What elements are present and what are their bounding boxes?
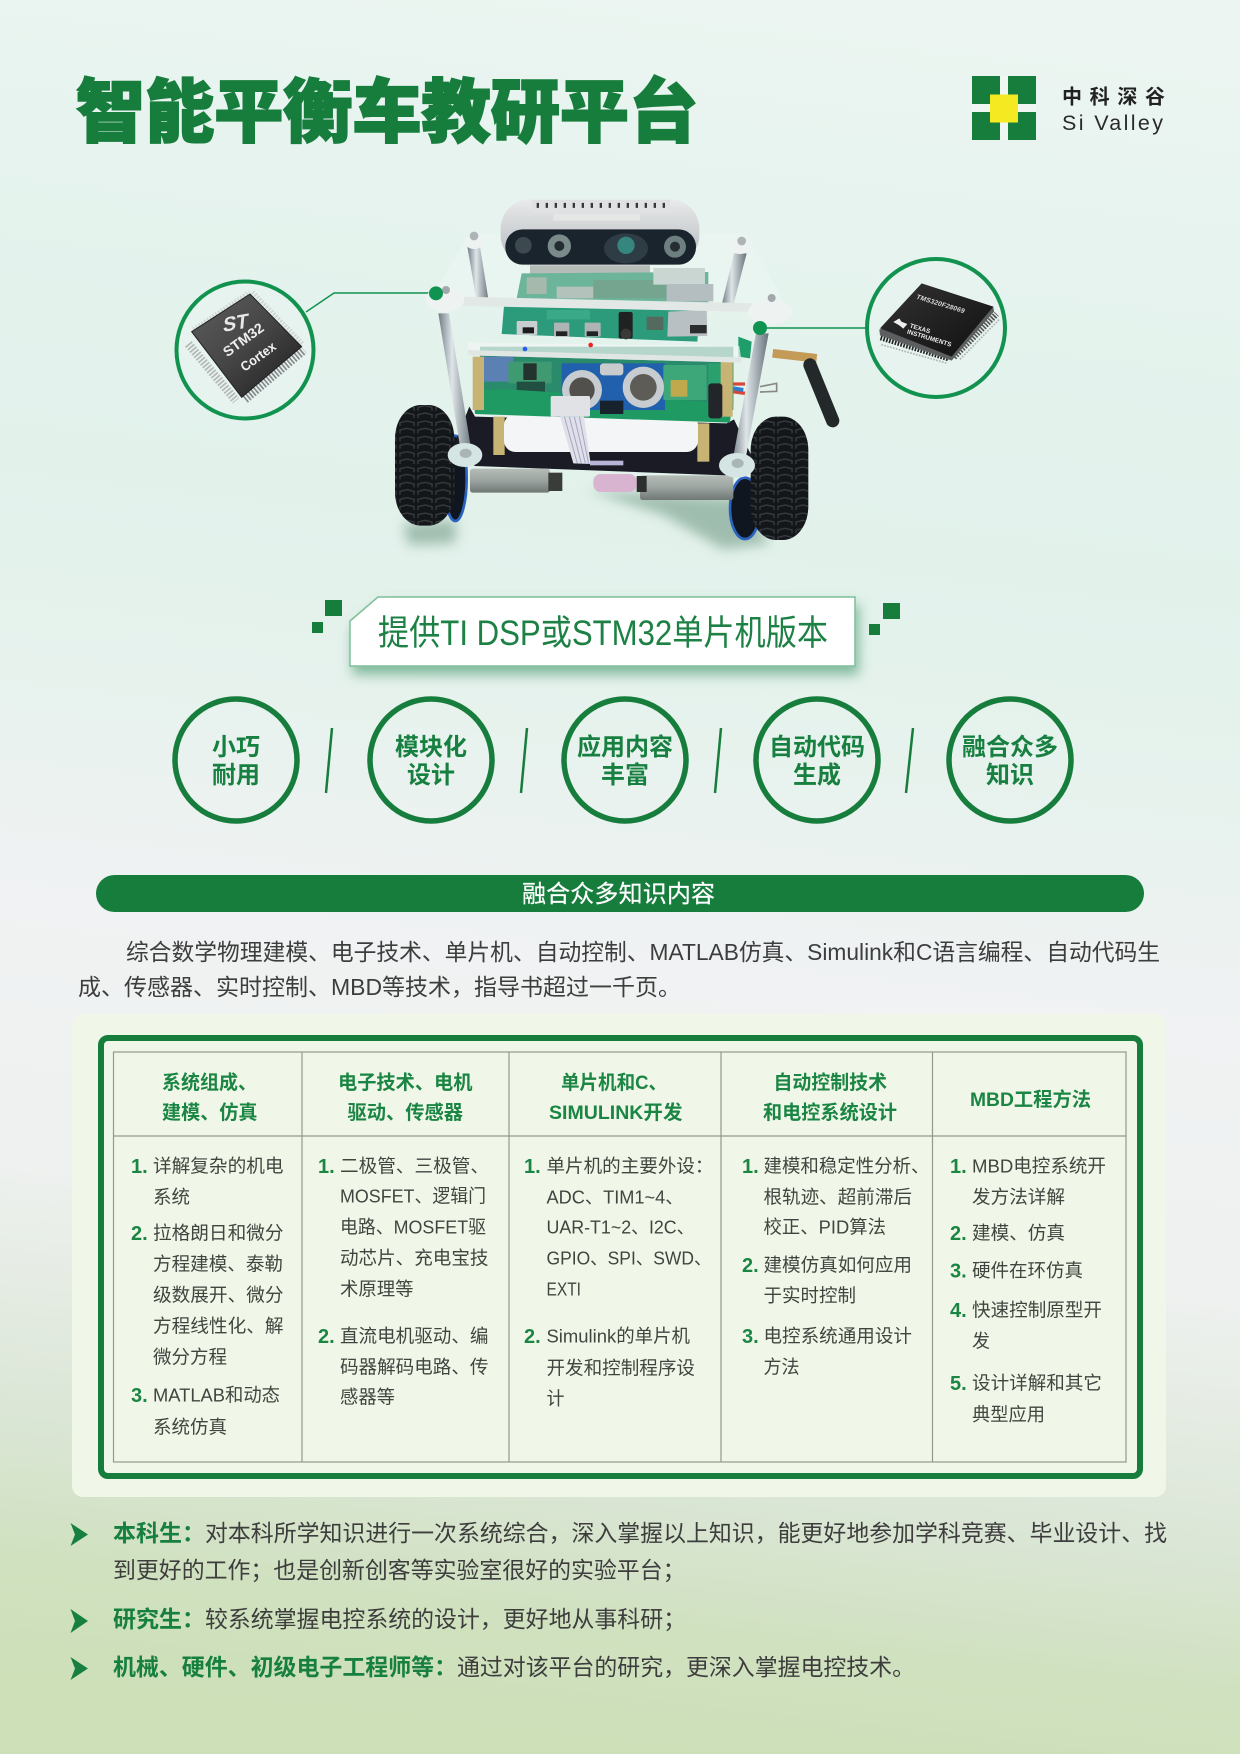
column 2 list: 术原理等 xyxy=(340,1278,414,1300)
column 5 list: 典型应用 xyxy=(972,1404,1045,1425)
title: 智能平衡车教研平台 xyxy=(76,74,698,151)
feature: 融合众多知识: 融合众多 xyxy=(962,734,1058,761)
column 4 list: 建模和稳定性分析、 xyxy=(764,1156,930,1176)
column 1 list xyxy=(131,1156,284,1438)
column 2 list: 直流电机驱动、编 xyxy=(340,1326,488,1346)
feature circles xyxy=(175,699,1071,821)
column headers: 驱动、传感器 xyxy=(348,1102,463,1124)
top acrylic front edge xyxy=(426,286,792,325)
bullet: graduates: 研究生： xyxy=(113,1606,205,1632)
column 3 list: ADC、TIM1~4、 xyxy=(546,1186,684,1208)
column 1 list: MATLAB和动态 xyxy=(153,1384,280,1406)
main pcb xyxy=(473,389,732,423)
feature: 模块化设计: 模块化 xyxy=(395,734,467,761)
column headers: SIMULINK开发 xyxy=(549,1101,683,1124)
bullet: undergraduates: 对本科所学知识进行一次系统综合，深入掌握以上知识，能更好地参加学科竞赛、毕业设计、找 xyxy=(205,1520,1167,1546)
green tab and wires xyxy=(733,337,777,393)
badge: version banner xyxy=(350,597,855,666)
column 3 list: Simulink的单片机 xyxy=(546,1326,690,1346)
table grid xyxy=(114,1052,1126,1462)
robot: balancing car photo sketch xyxy=(395,199,833,549)
column headers: 建模、仿真 xyxy=(162,1101,258,1124)
intro paragraph: 综合数学物理建模、电子技术、单片机、自动控制、MATLAB仿真、Simulink和C语言编程、自动代码生 xyxy=(126,939,1160,965)
column 3 list: UAR-T1~2、I2C、 xyxy=(546,1216,694,1238)
back acrylic plate xyxy=(427,233,790,313)
badge: version banner: 提供TI DSP或STM32单片机版本 xyxy=(378,614,828,653)
column 4 list: 校正、PID算法 xyxy=(764,1216,886,1238)
audience bullets xyxy=(70,1520,1167,1680)
column headers: MBD工程方法 xyxy=(970,1088,1091,1111)
feature: 小巧耐用: 小巧 xyxy=(212,734,260,761)
feature: 融合众多知识: 知识 xyxy=(986,762,1034,789)
column 3 list: GPIO、SPI、SWD、 xyxy=(546,1248,712,1268)
logo text: Si Valley xyxy=(1062,111,1163,135)
wheels xyxy=(395,405,808,540)
icon: STM32 chip in circle: STM32 xyxy=(220,319,267,360)
column 5 list: 5. xyxy=(950,1373,967,1395)
column 2 list: MOSFET、逻辑门 xyxy=(340,1186,486,1206)
ground shadow xyxy=(403,490,770,549)
column 1 list: 3. xyxy=(131,1385,148,1407)
bullet: graduates: 较系统掌握电控系统的设计，更好地从事科研； xyxy=(205,1606,686,1632)
bullet: engineers xyxy=(113,1654,915,1680)
column 3 list: 开发和控制程序设 xyxy=(546,1358,695,1378)
column 3 list: 计 xyxy=(546,1388,564,1409)
column headers: 自动控制技术 xyxy=(774,1071,887,1094)
feature: 模块化设计: 设计 xyxy=(407,762,455,789)
column 1 list: 系统仿真 xyxy=(153,1416,227,1438)
column headers: 电子技术、电机 xyxy=(338,1072,473,1094)
column 2 list: 电路、MOSFET驱 xyxy=(340,1216,486,1238)
logo text: 中科深谷 xyxy=(1062,86,1165,108)
bullet: undergraduates xyxy=(113,1520,1167,1583)
logo mark xyxy=(972,76,1036,140)
column 1 list: 微分方程 xyxy=(153,1346,227,1368)
feature: 自动代码生成: 生成 xyxy=(793,762,841,789)
column headers: 系统组成、 xyxy=(162,1071,257,1094)
column 1 list: 2. xyxy=(131,1223,148,1245)
middle acrylic plate xyxy=(468,343,742,363)
intro paragraph: 成、传感器、实时控制、MBD等技术，指导书超过一千页。 xyxy=(78,974,681,1000)
intro paragraph xyxy=(78,939,1160,1000)
ultrasonic sensor and modules xyxy=(562,363,733,414)
column 4 list: 于实时控制 xyxy=(764,1285,856,1306)
column 2 list xyxy=(318,1156,489,1408)
decorative squares right xyxy=(869,603,900,635)
bullet: undergraduates: 到更好的工作；也是创新创客等实验室很好的实验平台； xyxy=(113,1557,686,1583)
column 5 list: MBD电控系统开 xyxy=(972,1156,1106,1176)
section heading pill xyxy=(96,875,1144,912)
column 1 list: 拉格朗日和微分 xyxy=(153,1222,284,1244)
callout line: STM32 xyxy=(306,293,436,312)
feature: 自动代码生成: 自动代码 xyxy=(769,734,865,761)
column 2 list: 二极管、三极管、 xyxy=(340,1156,489,1176)
column 5 list: 硬件在环仿真 xyxy=(972,1260,1083,1281)
front posts and washers xyxy=(438,313,769,478)
column 5 list: 发 xyxy=(972,1330,990,1352)
column 3 list: 1. xyxy=(524,1156,541,1178)
feature: 融合众多知识 xyxy=(949,699,1071,821)
panel: knowledge table card xyxy=(72,1014,1166,1497)
column 3 list xyxy=(524,1156,714,1409)
arrow bullet 2 xyxy=(70,1609,88,1633)
column 2 list: 码器解码电路、传 xyxy=(340,1356,488,1378)
logo: Si Valley xyxy=(972,76,1165,140)
icon: STM32 chip in circle: ST xyxy=(222,310,250,337)
column 4 list: 2. xyxy=(742,1255,759,1277)
base plate xyxy=(451,407,757,475)
column 5 list: 快速控制原型开 xyxy=(972,1300,1102,1320)
lower electronics xyxy=(480,347,733,410)
icon: TI DSP chip in circle: INSTRUMENTS xyxy=(906,329,952,349)
feature: 小巧耐用: 耐用 xyxy=(212,762,260,789)
icon: TI DSP chip in circle xyxy=(867,259,1005,397)
bullet: engineers: 通过对该平台的研究，更深入掌握电控技术。 xyxy=(457,1654,915,1680)
ribbon cable xyxy=(551,396,623,465)
feature: 应用内容丰富 xyxy=(564,699,686,821)
raspberry pi board xyxy=(502,265,713,342)
lower brass standoffs xyxy=(493,417,709,462)
column 5 list: 2. xyxy=(950,1223,967,1245)
column headers: 单片机和C、 xyxy=(561,1072,667,1094)
decorative squares left xyxy=(312,600,342,633)
column 4 list: 1. xyxy=(742,1156,759,1178)
column 1 list: 系统 xyxy=(153,1186,190,1208)
callout line: TI DSP xyxy=(760,327,866,329)
column 4 list xyxy=(742,1156,930,1378)
arrow bullet 1 xyxy=(70,1523,88,1546)
feature: 小巧耐用 xyxy=(175,699,297,821)
feature: 自动代码生成 xyxy=(756,699,878,821)
column 1 list: 详解复杂的机电 xyxy=(153,1156,284,1176)
column 3 list: 2. xyxy=(524,1326,541,1348)
column 4 list: 根轨迹、超前滞后 xyxy=(764,1186,912,1208)
column 1 list: 方程建模、泰勒 xyxy=(153,1254,283,1274)
column 4 list: 方法 xyxy=(764,1356,800,1378)
column 5 list xyxy=(950,1156,1106,1425)
column 5 list: 4. xyxy=(950,1300,967,1322)
column 4 list: 3. xyxy=(742,1326,759,1348)
power bank xyxy=(504,414,698,452)
icon: STM32 chip in circle xyxy=(176,282,314,418)
column 4 list: 建模仿真如何应用 xyxy=(764,1254,912,1276)
camera xyxy=(501,199,699,265)
column headers: 和电控系统设计 xyxy=(763,1101,897,1124)
feature: 应用内容丰富: 应用内容 xyxy=(577,734,673,761)
column 2 list: 感器等 xyxy=(340,1386,395,1408)
column 2 list: 2. xyxy=(318,1326,335,1348)
feature: 应用内容丰富: 丰富 xyxy=(601,761,649,789)
column 3 list: EXTI xyxy=(546,1278,581,1300)
column 1 list: 级数展开、微分 xyxy=(153,1284,284,1306)
icon: STM32 chip in circle: Cortex xyxy=(238,338,279,374)
column 2 list: 动芯片、充电宝技 xyxy=(340,1248,488,1268)
column 3 list: 单片机的主要外设： xyxy=(546,1156,714,1176)
column 1 list: 方程线性化、解 xyxy=(153,1316,284,1336)
arrow bullet 3 xyxy=(70,1657,88,1680)
capacitor xyxy=(708,383,722,418)
bullet: undergraduates: 本科生： xyxy=(113,1520,205,1546)
column 1 list: 1. xyxy=(131,1156,148,1178)
motors xyxy=(470,469,733,500)
column 5 list: 1. xyxy=(950,1156,967,1178)
column 5 list: 3. xyxy=(950,1260,967,1282)
column 5 list: 建模、仿真 xyxy=(972,1222,1065,1244)
icon: TI DSP chip in circle: TMS320F28069 xyxy=(915,294,966,315)
column 4 list: 电控系统通用设计 xyxy=(764,1326,912,1346)
antenna xyxy=(773,353,833,421)
column headers xyxy=(162,1071,1091,1124)
icon: TI DSP chip in circle: TEXAS xyxy=(909,323,931,335)
upper brass standoffs xyxy=(473,357,733,417)
column 5 list: 设计详解和其它 xyxy=(972,1372,1102,1394)
green frame xyxy=(101,1038,1140,1476)
section heading pill: 融合众多知识内容 xyxy=(522,881,715,908)
column 2 list: 1. xyxy=(318,1156,335,1178)
column 5 list: 发方法详解 xyxy=(972,1186,1065,1208)
bullet: engineers: 机械、硬件、初级电子工程师等： xyxy=(113,1654,457,1680)
back posts xyxy=(464,232,750,305)
feature: 模块化设计 xyxy=(370,699,492,821)
callout dots xyxy=(429,286,767,335)
logo text xyxy=(1062,86,1165,135)
